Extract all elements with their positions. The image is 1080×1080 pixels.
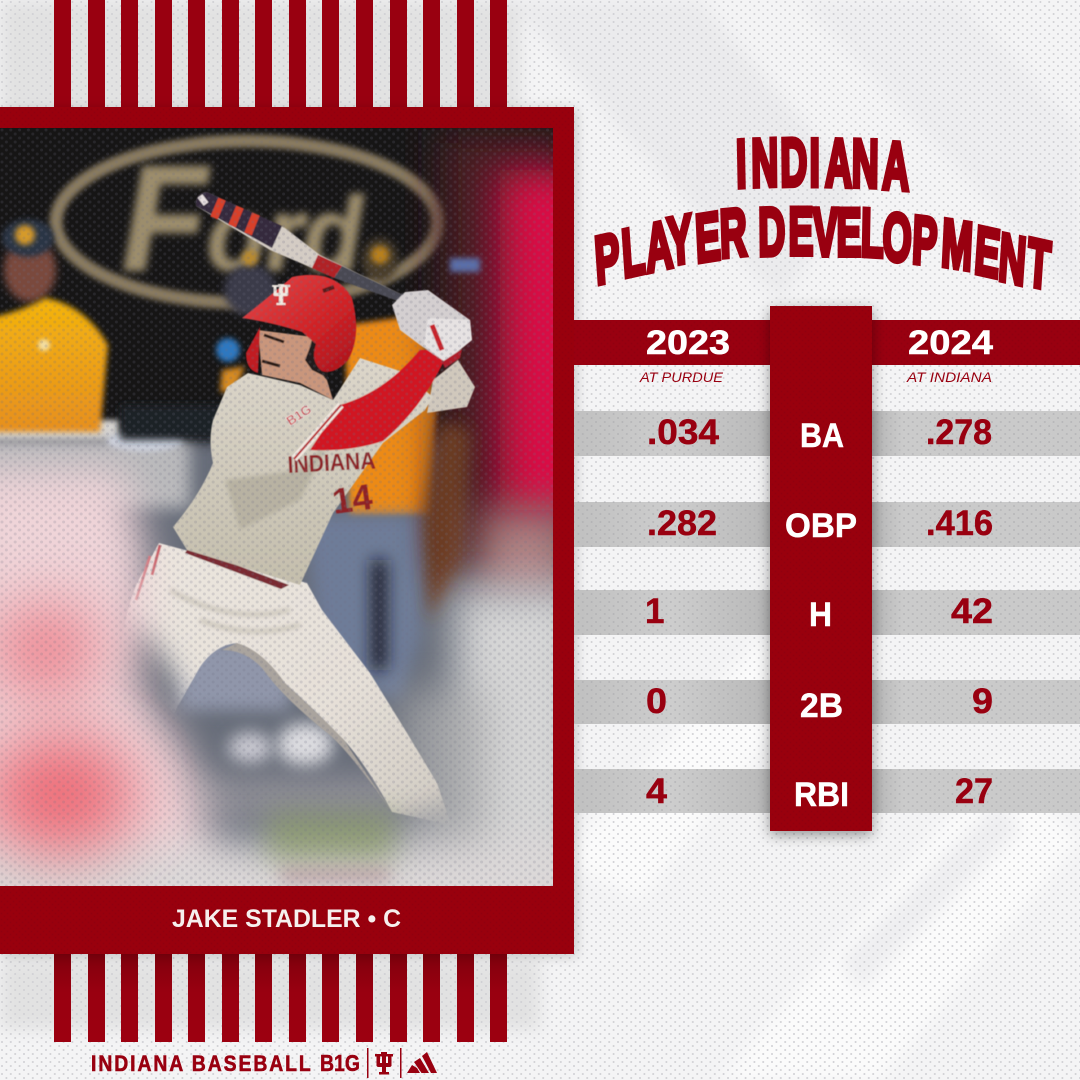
player photo [0,128,553,886]
stat labels: H [809,596,832,634]
bottom stripes [54,953,507,1042]
batter: 14 [329,476,375,522]
2023 values [645,413,720,811]
adidas logo [407,1052,437,1073]
school sublabels [639,369,992,385]
blurred background scene [0,128,553,876]
year headings [646,324,993,362]
top stripes [54,0,507,108]
header bar [574,320,1080,365]
school sublabels: AT INDIANA [906,369,992,385]
title line: player development: PLAYER DEVELOPMENT [592,193,1053,304]
big ten logo: B1G [320,1050,360,1076]
jersey lettering: INDIANA [287,447,376,479]
player name: JAKE STADLER • C [172,905,401,933]
stat labels: BA [800,417,844,455]
batter [120,192,475,825]
pants [120,543,451,825]
2024 values: 9 [972,682,993,721]
stat labels: OBP [785,507,857,545]
helmet logo [272,284,290,305]
stat table [574,306,1080,831]
title [592,123,1053,304]
school sublabels: AT PURDUE [639,369,724,385]
footer [91,1048,437,1078]
stat labels: 2B [800,687,843,725]
2024 values: .278 [926,413,992,452]
face [258,330,333,400]
2024 values [926,413,993,811]
2023 values: .034 [647,413,720,452]
ford sign: Ford [122,134,364,302]
year headings: 2023 [646,324,730,362]
gloves [392,290,472,362]
2024 values: .416 [926,504,993,543]
center column [770,306,872,831]
2024 values: 42 [951,592,993,631]
2023 values: 1 [645,592,664,631]
ford sign [56,134,438,303]
stat row bands [574,411,1080,813]
title line: indiana: INDIANA [735,123,910,205]
year headings: 2024 [908,324,993,362]
2023 values: .282 [647,504,717,543]
back arm [427,360,475,413]
photo frame [0,107,574,954]
fog fades [0,447,553,886]
2023 values: 0 [646,682,667,721]
red sleeve [310,350,443,450]
big patch: B1G [283,401,314,429]
footer wordmark: INDIANA BASEBALL [91,1052,313,1076]
2024 values: 27 [955,772,993,811]
jersey [173,358,433,585]
iu logo [375,1052,393,1074]
bat [196,192,403,301]
stat labels [785,417,857,814]
helmet [242,275,356,372]
2023 values: 4 [646,772,668,811]
stat labels: RBI [794,776,849,814]
halftone overlay [0,128,553,886]
